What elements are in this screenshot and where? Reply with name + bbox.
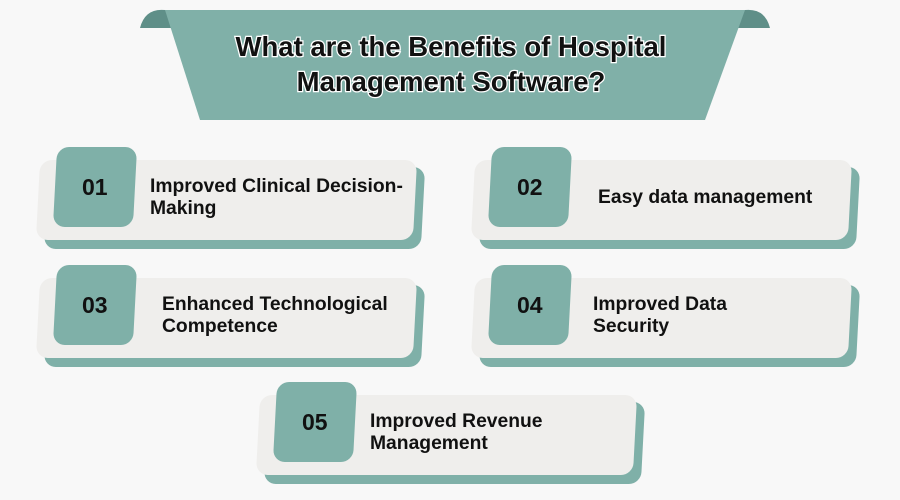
card 01 (36, 147, 424, 249)
card 01: 01 (82, 174, 108, 200)
text 03: Competence (162, 316, 278, 337)
title text: What are the Benefits of Hospital (236, 31, 666, 62)
card 04: 04 (517, 292, 543, 318)
text 05: Management (370, 433, 488, 454)
text 02: Easy data management (598, 187, 812, 208)
card 02 (472, 147, 860, 249)
card 04 (472, 265, 860, 367)
text 04: Security (593, 316, 669, 337)
text 01: Making (150, 198, 216, 219)
text 03: Enhanced Technological (162, 294, 388, 315)
card 02: 02 (517, 174, 543, 200)
text 01 (150, 176, 403, 219)
text 04: Improved Data (593, 294, 727, 315)
title banner (140, 10, 770, 120)
card 05 (256, 382, 644, 484)
card 05: 05 (302, 408, 328, 434)
text 03 (162, 294, 388, 337)
text 05: Improved Revenue (370, 411, 543, 432)
card 03: 03 (82, 292, 108, 318)
text 04 (593, 294, 728, 337)
text 01: Improved Clinical Decision- (150, 176, 403, 197)
card 03 (36, 265, 424, 367)
title banner: Management Software? (297, 66, 605, 97)
text 05 (370, 411, 543, 454)
